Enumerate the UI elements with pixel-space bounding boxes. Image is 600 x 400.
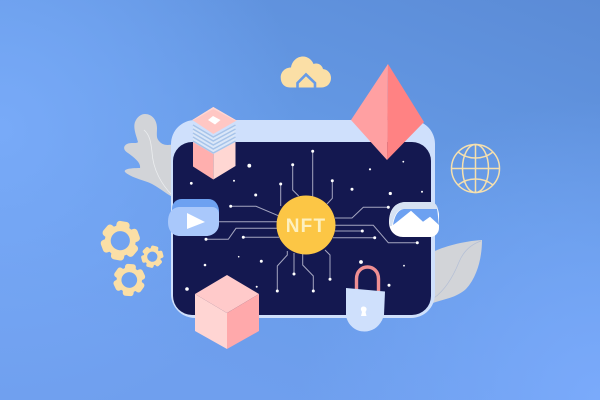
icon: right leaf — [433, 240, 482, 303]
icon: medium gear — [111, 263, 147, 297]
icon: image pill — [389, 202, 439, 237]
icon: padlock — [346, 267, 385, 332]
circuit lines — [206, 151, 417, 291]
icon: cloud with house — [281, 56, 331, 88]
icon: left leaf — [124, 114, 176, 199]
icon: server building — [192, 107, 237, 180]
panel: device frame — [171, 120, 435, 318]
icon: globe — [452, 144, 500, 192]
icon: small gear — [138, 243, 166, 270]
icon: pink cube — [195, 275, 259, 349]
icon: large gear — [97, 218, 144, 263]
panel: dark screen — [173, 142, 431, 315]
icon: ethereum diamond — [351, 64, 424, 160]
icon: video pill — [168, 199, 219, 236]
heading: NFT: NFT — [286, 216, 326, 237]
NFT coin — [276, 196, 336, 254]
icon: gears — [97, 218, 166, 297]
circuit nodes and stars — [185, 150, 423, 292]
